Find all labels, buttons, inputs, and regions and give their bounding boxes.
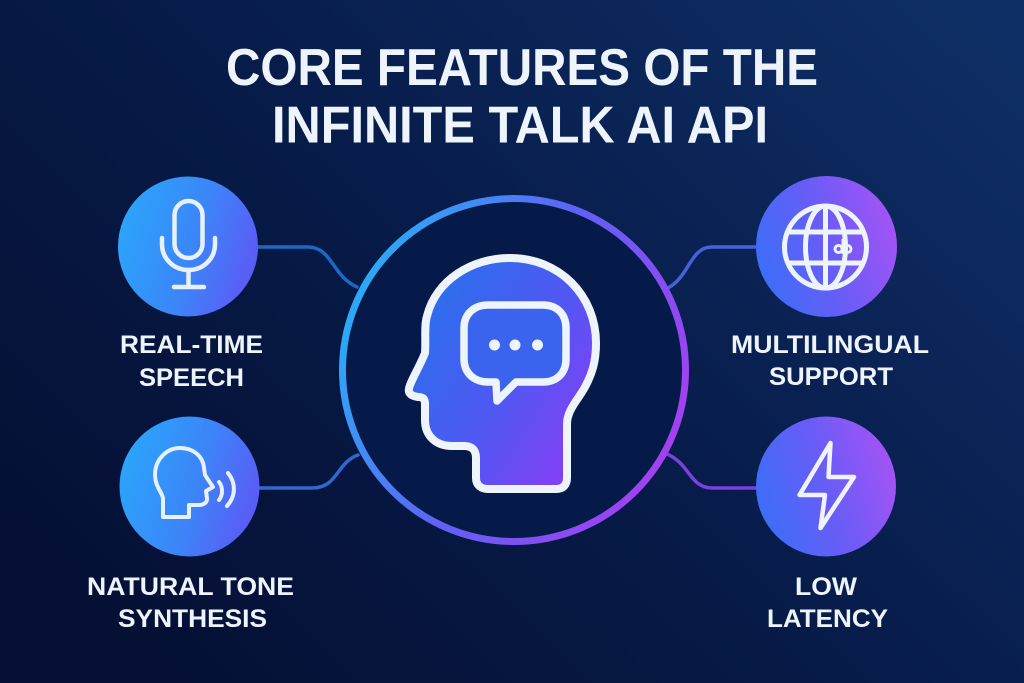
label: SPEECH <box>139 364 244 392</box>
label: SYNTHESIS <box>118 605 267 633</box>
feature: real-time speech <box>118 176 263 392</box>
icon circle: microphone <box>118 176 258 316</box>
ring <box>342 198 686 542</box>
label <box>767 573 888 633</box>
label: LOW <box>795 573 857 601</box>
label <box>731 331 929 391</box>
label: MULTILINGUAL <box>731 331 929 359</box>
head silhouette <box>409 258 596 489</box>
title <box>226 39 818 154</box>
feature: low latency <box>756 416 896 633</box>
title: CORE FEATURES OF THE <box>226 39 818 97</box>
title: INFINITE TALK AI API <box>272 96 768 154</box>
globe glyph <box>835 239 851 254</box>
label: REAL-TIME <box>120 331 263 359</box>
label <box>87 573 294 633</box>
feature: natural tone synthesis <box>87 416 294 633</box>
connector lines <box>258 247 756 488</box>
feature: multilingual support <box>731 176 929 391</box>
icon circle: globe <box>756 176 897 317</box>
icon circle: speaking head <box>120 416 260 556</box>
icon: head with speech bubble <box>409 258 596 489</box>
speech bubble <box>464 305 566 401</box>
icon circle: lightning bolt <box>756 416 896 556</box>
label: NATURAL TONE <box>87 573 294 601</box>
label: LATENCY <box>767 605 888 633</box>
bubble dots <box>489 340 543 350</box>
label <box>120 331 263 392</box>
central circle with head icon <box>342 198 686 542</box>
label: SUPPORT <box>769 363 893 391</box>
